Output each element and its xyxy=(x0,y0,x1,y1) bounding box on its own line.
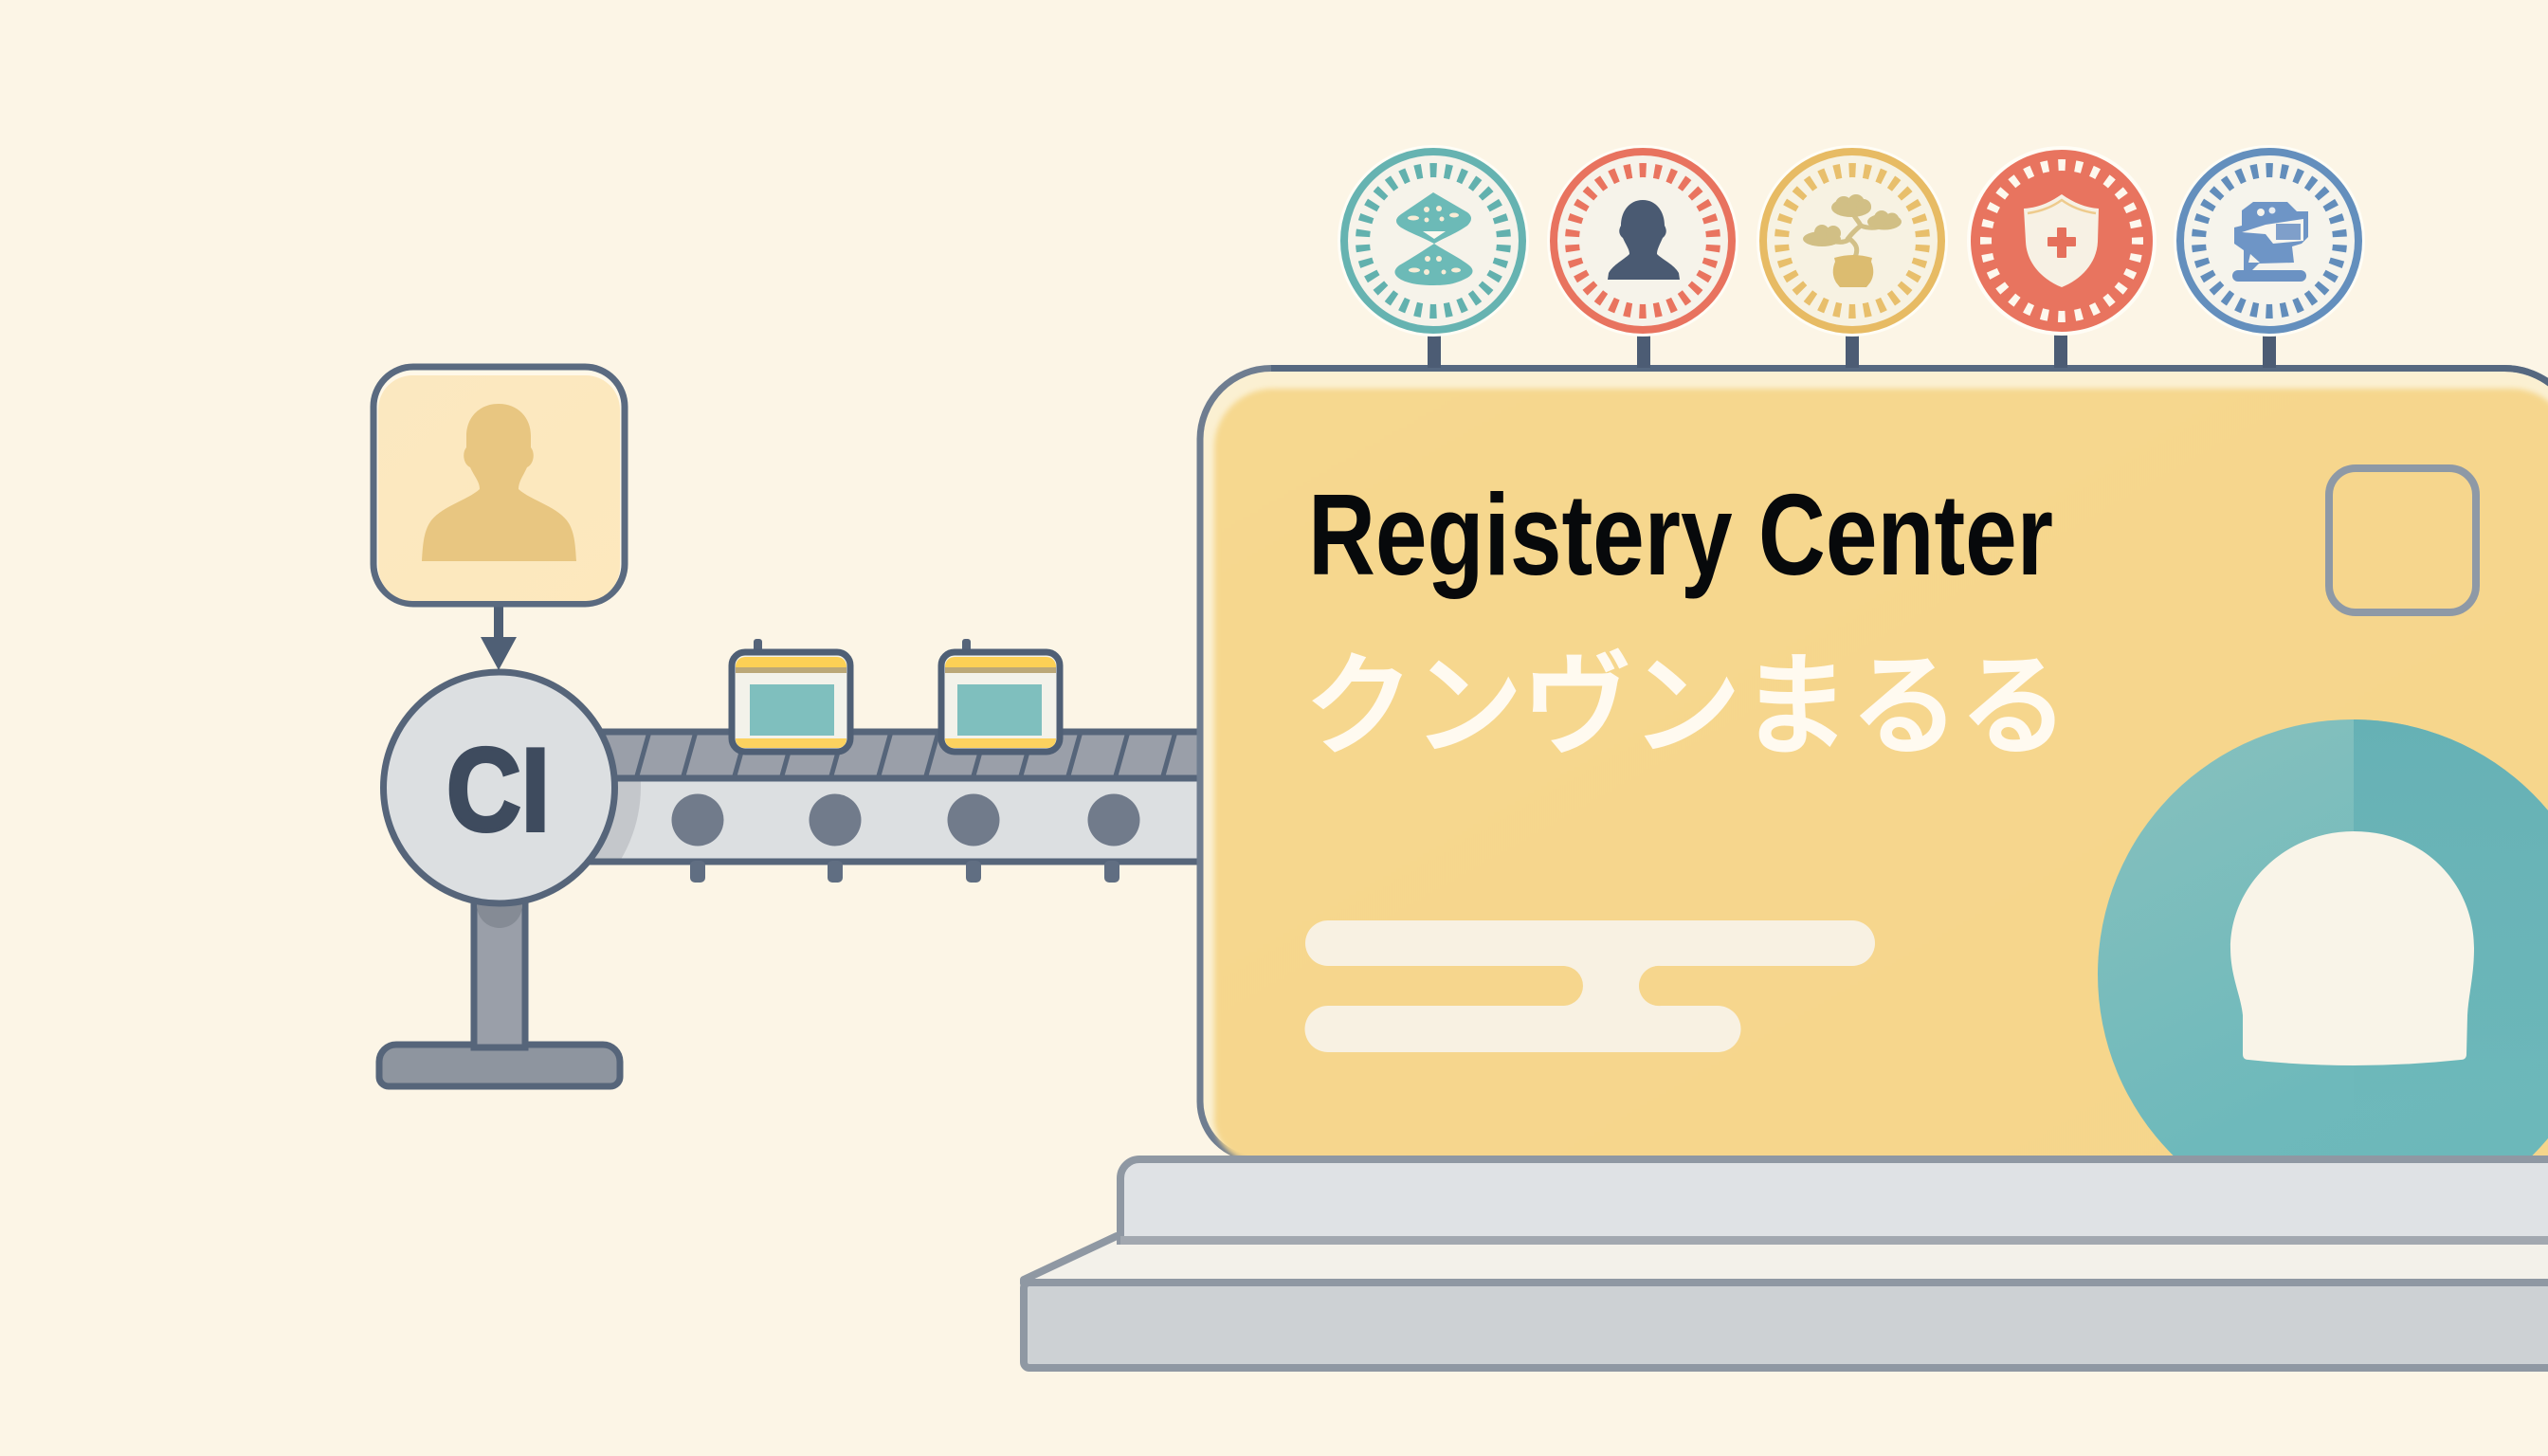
CI label: CI xyxy=(446,725,550,856)
CI node xyxy=(383,672,614,903)
plinth base xyxy=(1024,1159,2548,1368)
teal avatar badge xyxy=(2098,719,2548,1156)
panel: registry center card xyxy=(1200,368,2548,1229)
placeholder text bars xyxy=(1304,920,1875,1052)
icon: developer silhouette xyxy=(422,404,576,561)
pedestal stand for CI xyxy=(379,883,620,1086)
small empty square xyxy=(2329,468,2476,612)
subheading: Japanese text: クンヴンまるる xyxy=(1304,645,2068,770)
icon: red person badge xyxy=(1547,145,1738,337)
arrow: developer to CI xyxy=(481,605,517,670)
plinth top block xyxy=(1120,1159,2548,1241)
icon: red shield badge xyxy=(1967,146,2157,336)
icon: yellow bonsai badge xyxy=(1756,145,1948,337)
illustration: CI pipeline to registry center xyxy=(370,145,2548,1372)
plinth middle step xyxy=(1024,1236,2548,1283)
belt slats xyxy=(635,736,1177,775)
panel: conveyor belt xyxy=(590,728,1196,883)
heading: Registery Center: Registery Center xyxy=(1308,470,2053,599)
icon: teal hourglass badge xyxy=(1338,145,1529,337)
package 1 on belt xyxy=(732,639,850,752)
package 2 on belt xyxy=(941,639,1060,752)
rollers xyxy=(671,794,1139,846)
icon: blue machine badge xyxy=(2174,145,2365,337)
belt feet xyxy=(690,861,1119,883)
panel: developer card xyxy=(373,367,625,604)
badge stems xyxy=(1428,332,2276,368)
plinth bottom block xyxy=(1024,1283,2548,1368)
